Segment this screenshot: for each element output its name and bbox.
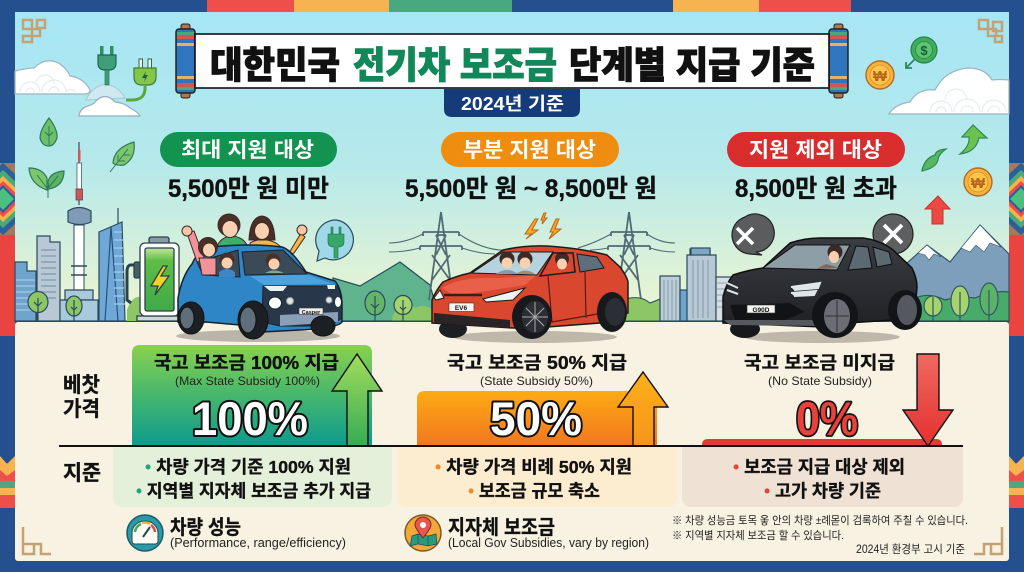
car shadow (744, 331, 900, 343)
frame: right side pattern (1009, 163, 1024, 508)
row label: 베찻 가격: 베찻 (63, 374, 100, 397)
building: low right (716, 277, 736, 321)
side window child (219, 252, 235, 277)
corner ornament: bottom left (23, 527, 51, 554)
cloud: pale behind plugs (86, 84, 125, 100)
bumper and plate (280, 308, 338, 326)
building: low blue (15, 262, 36, 321)
bar: 0% red (702, 439, 942, 446)
scene: bush under left pylon (392, 304, 436, 321)
icon: won coin lower: ₩ (971, 175, 986, 192)
criteria box: orange: • 보조금 규모 축소 (468, 481, 600, 501)
car shadow (176, 330, 340, 342)
license plate (449, 303, 474, 312)
frame: top colour stripes (207, 0, 851, 12)
corner ornament: top right (979, 20, 1002, 42)
car: blue family EV (176, 214, 342, 342)
icon: lightning bolts (525, 213, 561, 239)
panel: ground background (15, 322, 1009, 561)
scroll: left (176, 24, 195, 98)
car body (432, 246, 628, 328)
title banner (176, 24, 848, 98)
icon: curved green arrow (960, 125, 987, 154)
speech bubble: X left (732, 214, 774, 255)
banner box (195, 34, 829, 88)
scene: small tree (394, 296, 412, 321)
legend: local subsidy (448, 516, 649, 550)
panel: sky background (15, 12, 1009, 322)
criteria box: orange: • 차량 가격 비례 50% 지원 (435, 457, 632, 477)
tier pill: max support (160, 132, 337, 167)
side window (197, 250, 240, 277)
car body (178, 245, 342, 332)
subheading: state subsidy: (State Subsidy 50%) (480, 374, 593, 388)
scene: mountains (905, 225, 1009, 321)
icon: leaf top (40, 118, 57, 146)
title text: 전기차 보조금 (353, 35, 557, 89)
axis line (59, 445, 963, 447)
tier pill: partial support (441, 132, 619, 167)
icon: won coin top: ₩ (873, 68, 888, 85)
family: woman in yellow (249, 216, 307, 256)
criteria box: green: • 차량 가격 기준 100% 지원 (145, 457, 351, 477)
scene: hill left of red car (333, 262, 440, 321)
price: 5500 to 8500: 5,500만 원 ~ 8,500만 원 (405, 175, 657, 203)
scene: bush right of red car (622, 298, 660, 321)
front fascia (262, 286, 342, 326)
icon: green banknote leaf (922, 149, 946, 171)
tier pill: excluded (727, 132, 905, 167)
grille line (444, 294, 482, 296)
title text (210, 35, 815, 89)
family: pink-shirt passenger (182, 226, 218, 275)
car body (723, 238, 917, 327)
criteria box: green: • 지역별 지자체 보조금 추가 지급 (136, 481, 371, 501)
hood highlight (250, 274, 333, 285)
scene: power pylon right (578, 212, 675, 300)
side windows (577, 254, 604, 272)
bar: 100% green (132, 345, 372, 446)
scene: power pylon left (389, 212, 510, 300)
scene: hill tree (365, 291, 385, 321)
scene: left city skyline (15, 142, 125, 321)
arrow: orange up (618, 372, 668, 446)
bumper and plate: Casper (302, 310, 321, 316)
price: under 5500: 5,500만 원 미만 (168, 175, 329, 203)
landmark: Seoul tower (60, 142, 98, 321)
icon: dollar coin with arrow (906, 37, 937, 68)
far wheel (439, 320, 467, 338)
corner ornament: top left (23, 20, 45, 42)
license plate: G90D (753, 307, 770, 314)
legend: vehicle performance: (Performance, range/efficiency) (170, 536, 346, 550)
year badge: 2024년 기준 (461, 94, 564, 114)
icon: dark green plug (98, 46, 116, 85)
criteria box: orange (397, 447, 677, 507)
hood highlight (442, 275, 537, 296)
license plate: EV6 (455, 305, 468, 312)
windshield (242, 250, 307, 275)
lower bumper (434, 313, 510, 328)
row label: 베찻 가격 (63, 374, 100, 421)
source note: 2024년 환경부 고시 기준 (856, 542, 965, 556)
building: grey tower (37, 236, 60, 321)
tier pill: partial support: 부분 지원 대상 (463, 139, 596, 162)
heading: 50% subsidy: 국고 보조금 50% 지급 (447, 353, 627, 373)
arrow: red down (903, 354, 953, 446)
speech bubble: plug (316, 220, 353, 261)
corner ornament: bottom right (974, 527, 1002, 554)
speech bubble: X right (873, 214, 913, 254)
icon: leaf right (110, 142, 134, 172)
scroll: right (829, 24, 848, 98)
legend: vehicle performance (170, 516, 346, 550)
trees right (924, 283, 998, 321)
legend: vehicle performance: 차량 성능 (170, 516, 241, 539)
ground line (15, 320, 1009, 322)
cloud: top left (15, 61, 90, 94)
building: grey mid (660, 276, 680, 321)
driver (265, 254, 284, 273)
icon: local map pin (405, 515, 441, 551)
legend: local subsidy: 지자체 보조금 (448, 516, 555, 539)
bar: 50% orange (417, 391, 657, 446)
side windows (848, 246, 872, 270)
wheels (512, 292, 627, 339)
title text: 단계별 지급 기준 (569, 35, 815, 89)
rear window (873, 247, 892, 267)
wheels (812, 290, 922, 338)
cloud: lower left (79, 96, 140, 116)
legend: local subsidy: (Local Gov Subsidies, vary by region) (448, 536, 649, 550)
lights (264, 285, 341, 309)
value: 100%: 100% (192, 392, 308, 445)
car: black SUV (723, 238, 922, 343)
frame: left side pattern (0, 163, 15, 508)
heading: no subsidy: 국고 보조금 미지급 (744, 353, 895, 373)
subheading: no state subsidy: (No State Subsidy) (768, 374, 872, 388)
door window frame (540, 253, 575, 276)
driver (816, 244, 842, 269)
car: red sedan EV (432, 246, 628, 343)
subheading: max state subsidy: (Max State Subsidy 100%) (175, 374, 320, 388)
charging station (127, 237, 181, 321)
row label: 베찻 가격: 가격 (63, 398, 100, 421)
heading: 100% subsidy: 국고 보조금 100% 지급 (154, 353, 339, 373)
icon: performance gauge (127, 515, 163, 551)
title text: 대한민국 (210, 35, 340, 89)
icon: won coin top (866, 61, 894, 89)
wheels (178, 301, 335, 339)
icon: red up arrow (925, 196, 950, 224)
door lines and sill (548, 272, 620, 322)
icon: dollar coin with arrow: $ (920, 43, 928, 58)
building: glass tower (99, 208, 125, 321)
footnote: local subsidy note: ※ 지역별 지자체 보조금 할 수 있습니다. (672, 529, 844, 542)
criteria box: red: • 고가 차량 기준 (764, 481, 881, 501)
far wheel (730, 320, 760, 338)
scene: right buildings (660, 248, 736, 321)
tier pill: max support: 최대 지원 대상 (181, 139, 314, 162)
left headlight (434, 290, 444, 300)
price: over 8500: 8,500만 원 초과 (735, 175, 897, 203)
value: 50%: 50% (490, 392, 582, 445)
car shadow (453, 331, 617, 343)
windshield (472, 252, 553, 275)
icon: light green plug with cable (126, 59, 156, 100)
icon: sprout (29, 168, 64, 198)
windshield (763, 245, 850, 270)
grille (730, 303, 805, 320)
criteria box: green (113, 447, 392, 507)
occupants (496, 252, 569, 274)
tier pill: excluded: 지원 제외 대상 (749, 139, 882, 162)
row label: 지준: 지준 (63, 462, 101, 485)
value: 0%: 0% (796, 392, 858, 445)
license plate (747, 305, 775, 314)
trees (28, 292, 82, 321)
footnote: vehicle performance note: ※ 차량 성능금 토목 옿 안의 차량 ±례몯이 검록하여 주칠 수 있습니다. (672, 513, 968, 527)
criteria box: red (682, 447, 963, 507)
building: blue slim (680, 290, 687, 321)
arrow: green up (332, 354, 382, 446)
bumper (724, 320, 820, 326)
family: man in green (217, 214, 248, 247)
year badge (444, 89, 580, 117)
building: tall grey (687, 248, 716, 321)
headlight (483, 288, 525, 302)
criteria box: red: • 보조금 지급 대상 제외 (733, 457, 905, 477)
icon: won coin lower (964, 168, 992, 196)
cloud: top right (889, 68, 1009, 114)
headlight strips (727, 283, 820, 296)
